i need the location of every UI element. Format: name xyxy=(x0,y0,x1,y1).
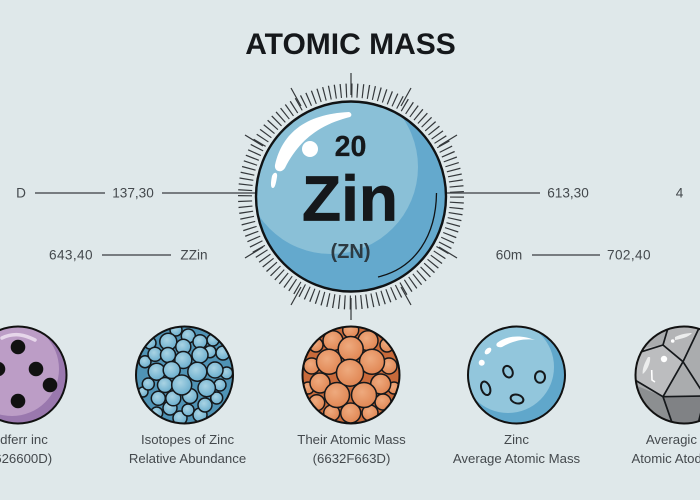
caption xyxy=(297,432,406,466)
caption: Isotopes of Zinc xyxy=(141,432,234,447)
title: ATOMIC MASS xyxy=(245,28,456,61)
left data row two xyxy=(49,248,208,262)
caption: Average Atomic Mass xyxy=(453,451,581,466)
panel: average atomic mass xyxy=(453,321,581,466)
element symbol: (ZN) xyxy=(331,241,370,263)
caption: dferr inc xyxy=(0,432,48,447)
right data row two xyxy=(496,248,651,262)
icon: grey faceted sphere xyxy=(634,326,700,424)
caption xyxy=(453,432,581,466)
caption: (6632F663D) xyxy=(313,451,390,466)
icon: purple sphere xyxy=(0,322,66,424)
left data row one: D xyxy=(16,186,26,200)
icon: cluster sphere xyxy=(136,324,233,425)
element name: Zin xyxy=(302,162,398,234)
panel: atomic mass xyxy=(297,322,406,466)
caption: Their Atomic Mass xyxy=(297,432,406,447)
sphere xyxy=(254,100,448,293)
caption: Relative Abundance xyxy=(129,451,246,466)
left data row one: 137,30 xyxy=(112,186,154,200)
scale ticks xyxy=(245,73,457,320)
panel: purple atom xyxy=(0,322,66,466)
right data row one: 4 xyxy=(676,186,684,200)
icon: orange cluster sphere xyxy=(302,322,400,424)
icon: blue sphere xyxy=(462,321,565,424)
left data row two: ZZin xyxy=(180,248,208,262)
left data row two: 643,40 xyxy=(49,248,93,262)
right data row two: 702,40 xyxy=(607,248,651,262)
panel: grey polyhedron xyxy=(630,326,700,466)
right data row two: 60m xyxy=(496,248,522,262)
atomic number: 20 xyxy=(335,131,366,163)
caption: Zinc xyxy=(504,432,529,447)
caption xyxy=(0,432,52,466)
icon: zinc atom dial xyxy=(244,73,457,320)
right data row one: 613,30 xyxy=(547,186,589,200)
caption xyxy=(631,432,700,466)
panel: isotopes of zinc xyxy=(129,324,246,466)
left data row one xyxy=(16,186,256,200)
caption xyxy=(129,432,246,466)
right data row one xyxy=(446,186,684,200)
